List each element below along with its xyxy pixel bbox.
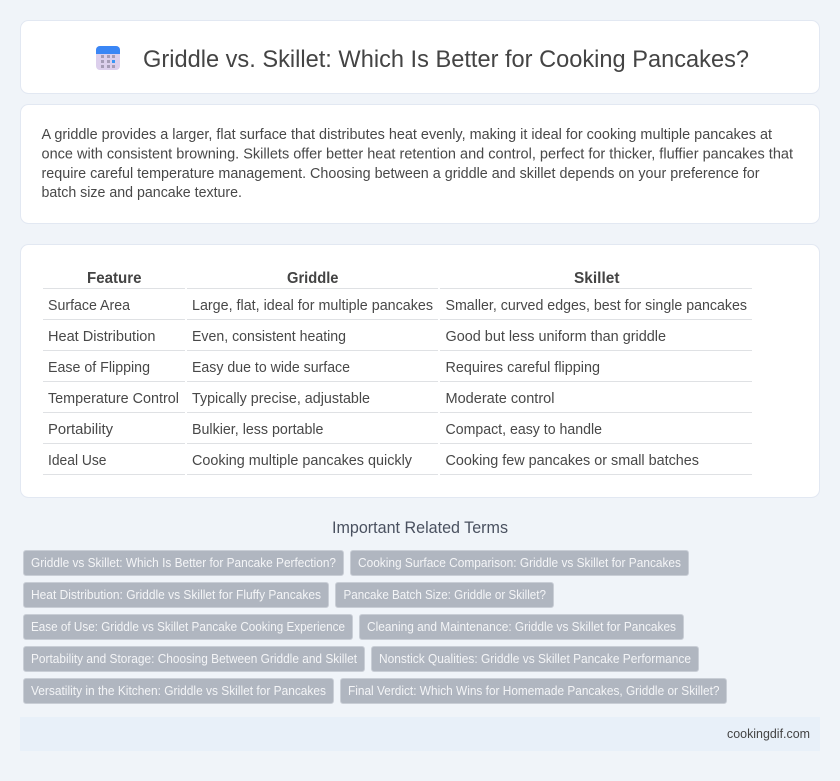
tag: Final Verdict: Which Wins for Homemade Pancakes, Griddle or Skillet? [348,684,720,698]
tag: Versatility in the Kitchen: Griddle vs Skillet for Pancakes [31,684,326,698]
row: temperature control: Temperature Control [48,391,179,407]
tag: Cooking Surface Comparison: Griddle vs Skillet for Pancakes [358,556,681,570]
table header row [43,270,752,289]
intro paragraph: once with consistent browning. Skillets offer better heat retention and control, perfect for thicker, fluffier pancakes that [42,146,793,162]
row: temperature control: Typically precise, adjustable [192,391,370,407]
icon: calendar [96,46,120,70]
tag: Heat Distribution: Griddle vs Skillet for Fluffy Pancakes [31,588,321,602]
row: surface area: Surface Area [48,298,130,314]
row: portability: Compact, easy to handle [446,422,602,438]
tag: Pancake Batch Size: Griddle or Skillet? [344,588,546,602]
row: temperature control: Moderate control [446,391,554,407]
panel: introduction text [20,104,820,224]
tag: Portability and Storage: Choosing Between Griddle and Skillet [31,652,357,666]
row: heat distribution: Even, consistent heating [192,329,346,345]
title: Griddle vs. Skillet: Which Is Better for Cooking Pancakes? [143,46,749,73]
row: heat distribution [43,329,752,351]
tag [350,550,688,576]
tag [24,614,352,640]
row: portability: Portability [48,422,114,438]
table header row: Feature [87,270,142,287]
row: ease of flipping: Easy due to wide surface [192,360,350,376]
tag [372,646,698,672]
row: ease of flipping: Ease of Flipping [48,360,150,376]
panel: comparison table [20,244,820,498]
footer bar [20,717,820,751]
tag [24,582,328,608]
intro paragraph: A griddle provides a larger, flat surface that distributes heat evenly, making it ideal for cooking multiple pancakes at [42,127,772,143]
row: heat distribution: Good but less uniform than griddle [446,329,666,345]
intro paragraph: batch size and pancake texture. [42,185,242,201]
row: portability [43,422,752,444]
tag: Griddle vs Skillet: Which Is Better for Pancake Perfection? [31,556,336,570]
tag [360,614,684,640]
footer source text: cookingdif.com [727,727,810,741]
heading: important related terms: Important Related Terms [332,519,508,537]
tag [24,646,364,672]
row: surface area: Smaller, curved edges, best for single pancakes [446,298,747,314]
tag: Ease of Use: Griddle vs Skillet Pancake Cooking Experience [31,620,345,634]
row: ideal use: Ideal Use [48,453,106,469]
row: ideal use [43,453,752,475]
table header row: Skillet [574,270,620,287]
row: heat distribution: Heat Distribution [48,329,156,345]
row: surface area [43,298,752,320]
row: surface area: Large, flat, ideal for multiple pancakes [192,298,433,314]
tag: Cleaning and Maintenance: Griddle vs Skillet for Pancakes [367,620,676,634]
tag [24,678,334,704]
intro paragraph [42,127,793,201]
row: portability: Bulkier, less portable [192,422,324,438]
tag [336,582,554,608]
tag [340,678,726,704]
row: ease of flipping: Requires careful flipping [446,360,600,376]
panel: title header [20,20,820,94]
tag: Nonstick Qualities: Griddle vs Skillet Pancake Performance [379,652,691,666]
related terms tags [24,550,726,704]
intro paragraph: require careful temperature management. Choosing between a griddle and skillet depends on your preference for [42,166,760,182]
row: ideal use: Cooking multiple pancakes quickly [192,453,413,469]
row: temperature control [43,391,752,413]
tag [24,550,344,576]
row: ease of flipping [43,360,752,382]
row: ideal use: Cooking few pancakes or small batches [446,453,699,469]
table header row: Griddle [287,270,339,287]
